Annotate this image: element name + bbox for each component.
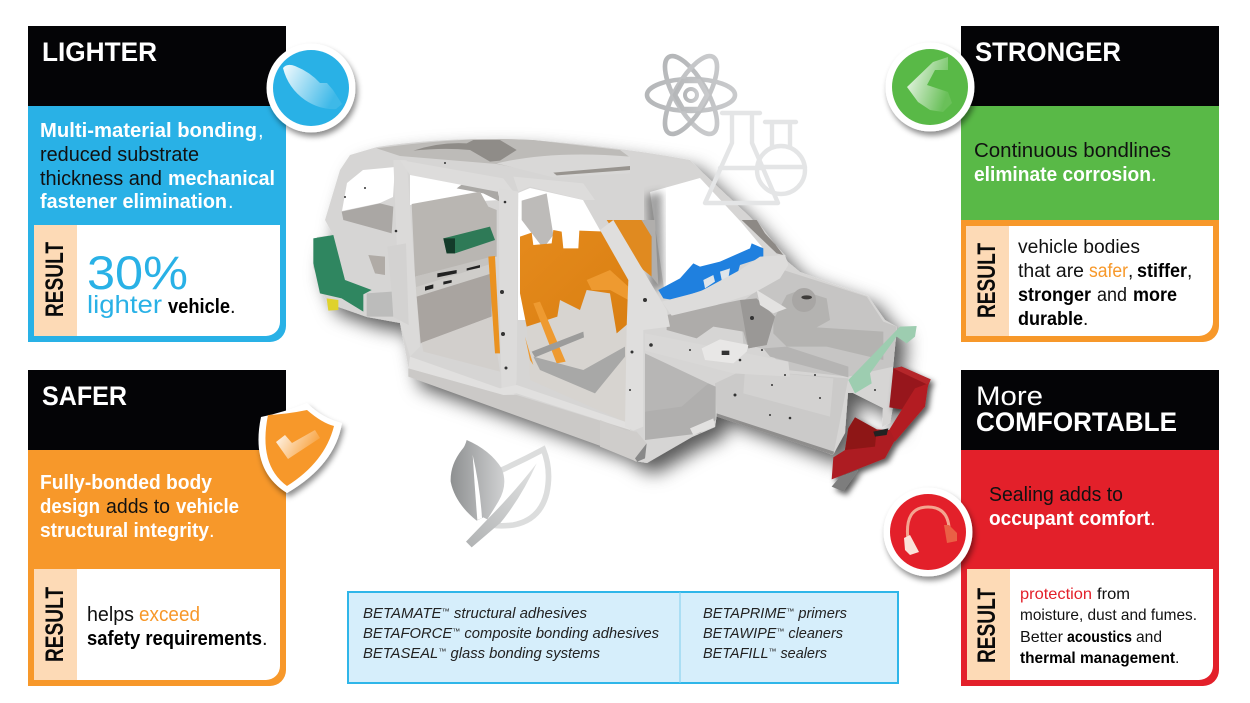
beam	[763, 347, 848, 377]
result text: exceed	[139, 604, 200, 626]
product list left column: ™	[441, 607, 450, 616]
result text: stiffer	[1137, 261, 1188, 282]
result text: 30%	[87, 246, 188, 299]
result text: durable	[1018, 309, 1083, 330]
product list right column	[703, 606, 847, 662]
result text: .	[1083, 309, 1088, 330]
result box	[34, 225, 280, 336]
body band	[961, 106, 1219, 220]
b pillar	[499, 188, 518, 400]
heading: SAFER	[42, 381, 127, 411]
body text: structural integrity	[40, 520, 210, 542]
dash arc	[662, 255, 788, 316]
hinge	[387, 243, 409, 325]
product list left column: BETAMATE	[363, 606, 439, 622]
panel background	[28, 370, 286, 686]
rear door frame	[393, 160, 420, 357]
result text: and	[1097, 285, 1127, 306]
windshield shading	[646, 192, 664, 292]
result text: safer	[1089, 261, 1129, 282]
windows	[342, 167, 762, 320]
lower box	[832, 417, 895, 479]
product list left column	[363, 606, 659, 662]
body text: adds to	[106, 496, 170, 518]
body text: Multi-material bonding	[40, 120, 257, 142]
product list right column: ™	[768, 647, 776, 656]
panel: stronger	[961, 26, 1219, 342]
result text: .	[230, 296, 236, 318]
product list right column: primers	[794, 606, 847, 622]
body text: .	[209, 520, 215, 542]
seat rails	[532, 332, 584, 357]
product list left column: ™	[452, 627, 460, 636]
body text: Fully-bonded body	[40, 472, 213, 494]
product list left column: ™	[438, 647, 446, 656]
icon: bicep badge	[886, 42, 974, 132]
result text: helps	[87, 604, 134, 626]
body text: vehicle	[176, 496, 239, 518]
bar	[885, 383, 928, 442]
product list right column: ™	[786, 607, 794, 616]
result label: RESULT	[973, 588, 1001, 663]
body text: design	[40, 496, 100, 518]
result text: lighter	[87, 291, 162, 319]
body text	[974, 140, 1171, 186]
panel background	[961, 370, 1219, 686]
product list right column: cleaners	[784, 626, 843, 642]
icon: shield badge	[258, 403, 342, 493]
result text: stronger	[1018, 285, 1092, 306]
result text	[87, 604, 268, 650]
body text: fastener elimination	[40, 191, 227, 213]
body text	[40, 120, 275, 213]
result box	[967, 569, 1213, 680]
product list right column: BETAPRIME	[703, 606, 786, 622]
mint radiator support	[848, 326, 917, 393]
product list left column: BETASEAL	[363, 646, 437, 662]
far windshield pillar	[742, 220, 783, 255]
sill	[408, 357, 630, 430]
heading: STRONGER	[975, 37, 1121, 67]
fender beam	[645, 333, 790, 377]
upper box	[889, 367, 931, 412]
result text: .	[1175, 650, 1179, 667]
body text	[989, 484, 1156, 530]
result tab	[34, 569, 77, 680]
panel: safer	[28, 370, 286, 686]
result text	[1018, 237, 1192, 330]
result text: from	[1097, 586, 1130, 603]
header band	[961, 26, 1219, 106]
result text: ,	[1128, 261, 1133, 282]
result text: and	[1136, 629, 1162, 646]
body text	[40, 472, 239, 542]
heading	[976, 381, 1177, 437]
blue crossbeam	[658, 243, 763, 300]
heading: COMFORTABLE	[976, 407, 1177, 437]
result text: more	[1133, 285, 1177, 306]
bumper assembly	[832, 367, 931, 492]
front body	[600, 220, 931, 492]
panel background	[28, 26, 286, 342]
rear green pack	[313, 235, 372, 312]
body text: eliminate corrosion	[974, 164, 1151, 186]
result tab	[967, 569, 1010, 680]
result box	[966, 226, 1213, 336]
panel: more comfortable	[961, 370, 1219, 686]
icon: feather badge	[266, 44, 356, 132]
result text: Better	[1020, 629, 1064, 646]
product list right column: ™	[776, 627, 784, 636]
body text: ,	[258, 120, 264, 142]
icon: leaves	[451, 440, 549, 547]
panel: lighter	[28, 26, 286, 342]
result tab	[34, 225, 77, 336]
bottom post	[832, 470, 858, 492]
icon: atom	[647, 49, 735, 141]
body dots	[344, 162, 876, 419]
result text: acoustics	[1067, 629, 1132, 646]
orange structure	[520, 230, 630, 333]
body text: .	[1150, 508, 1156, 530]
result text: safety requirements	[87, 628, 262, 650]
product list right column: BETAFILL	[703, 646, 769, 662]
heading: More	[976, 381, 1043, 411]
product list left column: glass bonding systems	[446, 646, 600, 662]
body text: mechanical	[168, 168, 275, 190]
roof opening	[313, 139, 630, 457]
result text	[1020, 586, 1197, 667]
result label: RESULT	[41, 242, 69, 317]
result label: RESULT	[973, 243, 1001, 318]
result tab	[966, 226, 1009, 336]
body text: Continuous bondlines	[974, 140, 1171, 162]
engine bay far side	[740, 270, 897, 377]
header band	[961, 370, 1219, 450]
product list right column: sealers	[776, 646, 827, 662]
product list left column: BETAFORCE	[363, 626, 451, 642]
header band	[28, 26, 286, 106]
body text: .	[228, 191, 234, 213]
body text: Sealing adds to	[989, 484, 1123, 506]
rear door interior	[412, 192, 497, 277]
pillars	[625, 280, 670, 431]
icon: flasks	[705, 113, 805, 203]
result text: that are	[1018, 261, 1084, 282]
header band	[28, 370, 286, 450]
result text: thermal management	[1020, 650, 1176, 667]
result text	[87, 246, 236, 319]
result text: moisture, dust and fumes.	[1020, 607, 1197, 624]
body text: .	[1151, 164, 1157, 186]
body text: thickness and	[40, 168, 162, 190]
car silhouette	[313, 139, 897, 463]
result frame	[961, 220, 1219, 342]
result text: .	[262, 628, 268, 650]
result text: ,	[1187, 261, 1192, 282]
lower side panel	[715, 370, 848, 455]
product list left column: structural adhesives	[450, 606, 587, 622]
product list left column: composite bonding adhesives	[460, 626, 659, 642]
result text: protection	[1020, 586, 1092, 603]
result text: vehicle	[168, 296, 230, 318]
heading: LIGHTER	[42, 37, 157, 67]
result label: RESULT	[41, 587, 69, 662]
result box	[34, 569, 280, 680]
front door interior	[522, 193, 553, 248]
product list right column: BETAWIPE	[703, 626, 777, 642]
car body	[313, 139, 931, 492]
result text: vehicle bodies	[1018, 237, 1140, 258]
product list box	[348, 592, 898, 683]
body text: occupant comfort	[989, 508, 1150, 530]
body text: reduced substrate	[40, 144, 199, 166]
orange behind pillar	[607, 220, 652, 277]
icon: headphones badge	[884, 488, 972, 576]
rear quarter interior	[342, 203, 393, 233]
